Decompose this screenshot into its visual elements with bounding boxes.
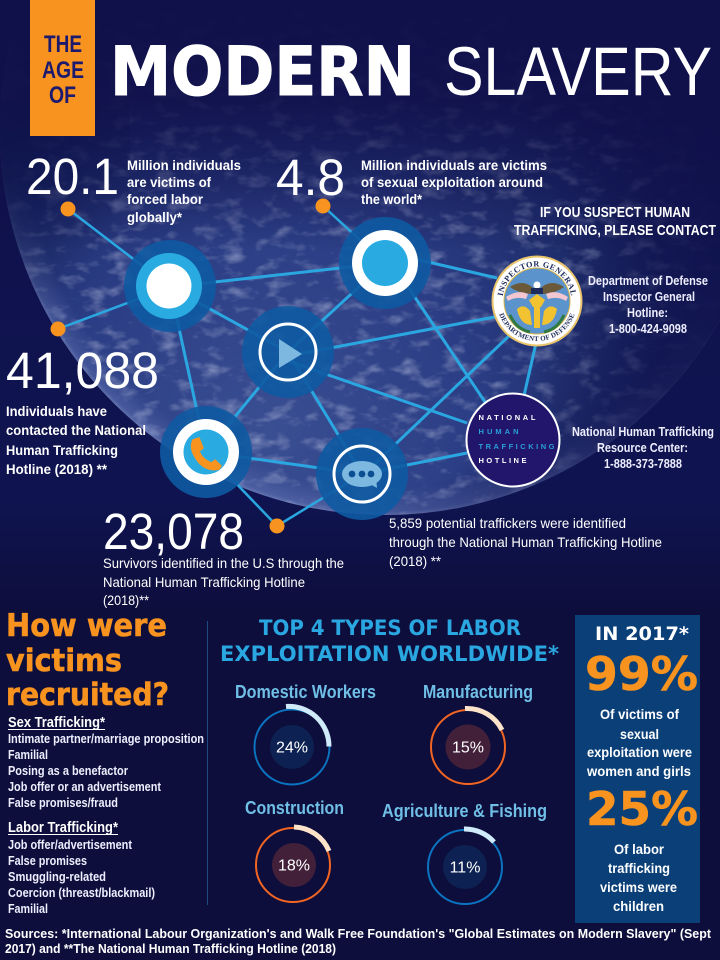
node: phone icon bbox=[160, 406, 252, 498]
stat: potential traffickers: through the National Human Trafficking Hotline bbox=[389, 534, 662, 550]
contact: national hotline: 1-888-373-7888 bbox=[604, 456, 682, 471]
chart: construction 18%: 18% bbox=[278, 858, 310, 874]
title badge: the age of: AGE bbox=[42, 57, 84, 84]
title: modern slavery: MODERN bbox=[110, 33, 415, 112]
panel: in 2017 statistics: Of victims of bbox=[600, 706, 679, 722]
chart: manufacturing 15% bbox=[423, 681, 533, 784]
sources footnote: 2017) and **The National Human Trafficking Hotline (2018) bbox=[5, 941, 336, 956]
stat: potential traffickers bbox=[389, 515, 662, 569]
title badge: the age of bbox=[30, 0, 95, 136]
node: white centre bbox=[124, 240, 216, 332]
contact: department of defense hotline: Hotline: bbox=[627, 305, 668, 320]
stat: 23,078 survivors bbox=[103, 503, 344, 608]
stat: 4.8 million sexual exploitation: the world* bbox=[361, 191, 422, 207]
stat: 41,088 hotline contacts: contacted the National bbox=[6, 422, 146, 438]
list: sex trafficking: Intimate partner/marriage proposition bbox=[8, 731, 204, 746]
stat: 41,088 hotline contacts: 41,088 bbox=[6, 342, 159, 399]
icon: national human trafficking hotline logo: NATIONAL bbox=[478, 413, 536, 422]
stat: 20.1 million forced labor: 20.1 bbox=[26, 148, 119, 205]
stat: 23,078 survivors: (2018)** bbox=[103, 592, 149, 608]
chart: domestic workers 24% bbox=[235, 681, 376, 784]
network connector lines bbox=[58, 206, 539, 526]
list: labor trafficking: Labor Trafficking* bbox=[8, 819, 118, 836]
panel: in 2017 statistics: Of labor bbox=[614, 841, 665, 857]
orange dot: sexual exploitation bbox=[316, 198, 330, 214]
title badge: the age of: THE bbox=[44, 31, 82, 58]
heading: how were victims recruited: recruited? bbox=[6, 677, 169, 713]
list: sex trafficking: Familial bbox=[8, 747, 48, 762]
node: blue centre bbox=[339, 217, 431, 309]
stat: 4.8 million sexual exploitation: Million individuals are victims bbox=[361, 157, 547, 173]
chart: agriculture and fishing 11%: 11% bbox=[450, 860, 480, 876]
contact heading bbox=[514, 204, 716, 239]
stat: 4.8 million sexual exploitation bbox=[276, 149, 547, 207]
stat: 20.1 million forced labor bbox=[26, 148, 241, 225]
contact: national hotline bbox=[572, 424, 714, 471]
list: sex trafficking: Posing as a benefactor bbox=[8, 763, 128, 778]
panel: in 2017 statistics bbox=[575, 615, 700, 923]
title: modern slavery bbox=[110, 33, 712, 112]
node: play icon bbox=[242, 306, 334, 398]
icon: inspector general seal: DEPARTMENT OF DEFENSE bbox=[499, 312, 574, 341]
heading: how were victims recruited: victims bbox=[6, 643, 122, 679]
heading: how were victims recruited bbox=[6, 608, 169, 713]
icon: national human trafficking hotline logo: HUMAN bbox=[478, 427, 518, 436]
heading: top 4 types of labor exploitation: EXPLOITATION WORLDWIDE* bbox=[220, 642, 559, 666]
chart: agriculture and fishing 11% bbox=[382, 800, 547, 904]
node: chat icon bbox=[316, 428, 408, 520]
stat: 20.1 million forced labor: are victims of bbox=[127, 174, 211, 190]
list: sex trafficking: Sex Trafficking* bbox=[8, 714, 105, 731]
list: labor trafficking: Job offer/advertisement bbox=[8, 837, 133, 852]
icon: national human trafficking hotline logo: TRAFFICKING bbox=[478, 442, 555, 451]
contact: department of defense hotline bbox=[588, 273, 708, 336]
chart: construction 18%: Construction bbox=[245, 797, 344, 818]
orange dot: hotline contacts bbox=[50, 322, 66, 336]
chart: domestic workers 24%: Domestic Workers bbox=[235, 681, 376, 702]
stat: 23,078 survivors: 23,078 bbox=[103, 503, 244, 560]
stat: potential traffickers: 5,859 potential traffickers were identified bbox=[389, 515, 626, 531]
panel: in 2017 statistics: exploitation were bbox=[587, 744, 692, 760]
chart: manufacturing 15%: Manufacturing bbox=[423, 681, 533, 702]
stat: 41,088 hotline contacts bbox=[6, 342, 159, 477]
list: labor trafficking: False promises bbox=[8, 853, 87, 868]
heading: top 4 types of labor exploitation: TOP 4 TYPES OF LABOR bbox=[259, 616, 521, 640]
list: labor trafficking: Familial bbox=[8, 901, 48, 916]
sources footnote: Sources: *International Labour Organization's and Walk Free Foundation's "Global Estimates on Modern Slavery" (Sept bbox=[5, 926, 712, 941]
stat: 23,078 survivors: National Human Trafficking Hotline bbox=[103, 574, 305, 590]
stat: 4.8 million sexual exploitation: of sexual exploitation around bbox=[361, 174, 543, 190]
panel: in 2017 statistics: IN 2017* bbox=[595, 623, 689, 645]
panel: in 2017 statistics: sexual bbox=[620, 726, 659, 742]
heading: top 4 types of labor exploitation bbox=[220, 616, 559, 666]
stat: potential traffickers: (2018) ** bbox=[389, 553, 442, 569]
list: labor trafficking: Coercion (threast/blackmail) bbox=[8, 885, 155, 900]
panel: in 2017 statistics: 25% bbox=[586, 782, 698, 836]
chart: construction 18% bbox=[245, 797, 344, 902]
sources footnote bbox=[5, 926, 712, 956]
list: labor trafficking bbox=[8, 819, 155, 916]
stat: 23,078 survivors: Survivors identified in the U.S through the bbox=[103, 555, 344, 571]
stat: 20.1 million forced labor: globally* bbox=[127, 209, 183, 225]
icon: inspector general seal bbox=[492, 256, 582, 346]
panel: in 2017 statistics: victims were bbox=[600, 879, 677, 895]
chart: agriculture and fishing 11%: Agriculture & Fishing bbox=[382, 800, 547, 821]
title badge: the age of: OF bbox=[49, 82, 76, 109]
stat: 20.1 million forced labor: Million individuals bbox=[127, 157, 241, 173]
heading: how were victims recruited: How were bbox=[6, 608, 167, 644]
panel: in 2017 statistics: 99% bbox=[585, 647, 698, 701]
contact heading: IF YOU SUSPECT HUMAN bbox=[540, 204, 690, 221]
panel: in 2017 statistics: children bbox=[613, 898, 664, 914]
stat: 20.1 million forced labor: forced labor bbox=[127, 191, 204, 207]
stat: 41,088 hotline contacts: Hotline (2018) ** bbox=[6, 461, 108, 477]
icon: national human trafficking hotline logo: HOTLINE bbox=[478, 456, 526, 465]
contact: national hotline: Resource Center: bbox=[597, 440, 688, 455]
panel: in 2017 statistics: trafficking bbox=[608, 860, 670, 876]
orange dot: survivors bbox=[270, 518, 284, 534]
stat: 41,088 hotline contacts: Human Trafficking bbox=[6, 442, 118, 458]
contact: department of defense hotline: Inspector General bbox=[603, 289, 695, 304]
list: labor trafficking: Smuggling-related bbox=[8, 869, 106, 884]
list: sex trafficking bbox=[8, 714, 204, 810]
icon: inspector general seal: INSPECTOR GENERAL bbox=[498, 261, 576, 296]
list: sex trafficking: Job offer or an advertisement bbox=[8, 779, 162, 794]
panel: in 2017 statistics: women and girls bbox=[586, 763, 691, 779]
chart: domestic workers 24%: 24% bbox=[276, 740, 308, 756]
list: sex trafficking: False promises/fraud bbox=[8, 795, 118, 810]
stat: 4.8 million sexual exploitation: 4.8 bbox=[276, 149, 345, 206]
background: earth from space bbox=[0, 0, 720, 568]
chart: manufacturing 15%: 15% bbox=[452, 740, 484, 756]
orange dot: forced labor bbox=[60, 202, 76, 216]
stat: 41,088 hotline contacts: Individuals have bbox=[6, 403, 107, 419]
icon: national human trafficking hotline logo bbox=[466, 394, 560, 486]
contact: department of defense hotline: 1-800-424-9098 bbox=[609, 321, 687, 336]
